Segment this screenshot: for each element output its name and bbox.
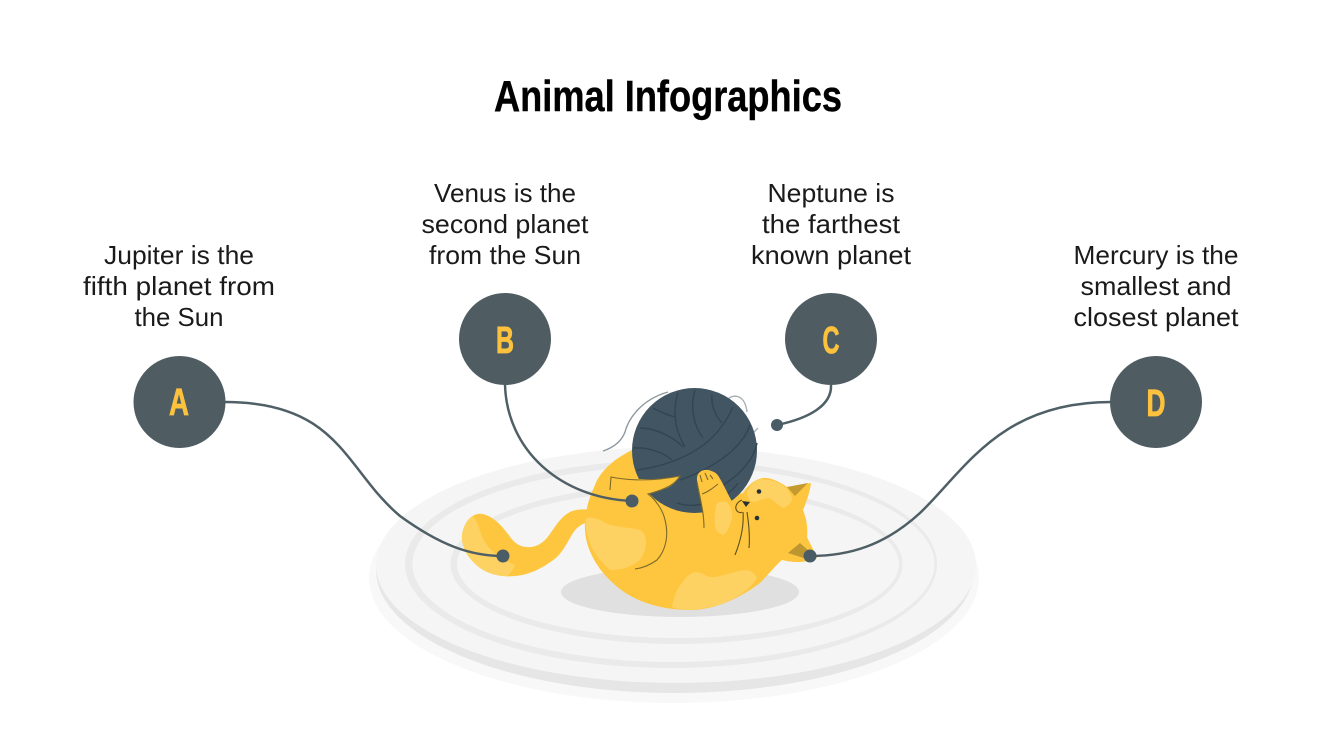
connector C (771, 385, 831, 431)
text C: the farthest (762, 209, 901, 239)
plate (369, 447, 979, 703)
text C (751, 178, 912, 270)
text A (83, 240, 275, 332)
text D: Mercury is the (1074, 240, 1238, 270)
circle B (459, 293, 551, 385)
cat shadow (561, 567, 799, 617)
circle D (1110, 356, 1202, 448)
connector D (804, 402, 1111, 562)
connector B (505, 385, 638, 508)
lower ear shade (788, 543, 810, 560)
cat body (585, 450, 817, 610)
cat right paw lines (697, 473, 718, 528)
title: Animal Infographics (494, 72, 842, 121)
circle D: D (1146, 383, 1166, 425)
cat arm highlight (715, 502, 732, 535)
cat hip highlight (586, 518, 646, 570)
text A: the Sun (134, 302, 224, 332)
text B (422, 178, 589, 270)
circle C (785, 293, 877, 385)
text A: Jupiter is the (104, 240, 254, 270)
text D: closest planet (1074, 302, 1239, 332)
text B: second planet (422, 209, 589, 239)
cat belly highlight (672, 570, 757, 610)
cat tail highlight (462, 516, 515, 576)
circle B: B (496, 320, 514, 362)
circle A: A (169, 382, 189, 424)
text D (1074, 240, 1239, 332)
cat head highlight (747, 479, 792, 508)
cat right paw (697, 470, 737, 532)
text C: known planet (751, 240, 912, 270)
cat left paw (605, 476, 680, 505)
cat left paw outline (610, 476, 680, 569)
cat face (735, 489, 761, 555)
upper ear shade (787, 483, 808, 496)
cat (462, 388, 817, 610)
text A: fifth planet from (83, 271, 275, 301)
cat tail (462, 509, 595, 576)
text D: smallest and (1080, 271, 1232, 301)
connector A (225, 402, 510, 562)
text B: from the Sun (429, 240, 581, 270)
yarn ball (603, 388, 758, 513)
circle C: C (822, 320, 840, 362)
text C: Neptune is (768, 178, 894, 208)
text B: Venus is the (434, 178, 576, 208)
circle A (134, 356, 226, 448)
